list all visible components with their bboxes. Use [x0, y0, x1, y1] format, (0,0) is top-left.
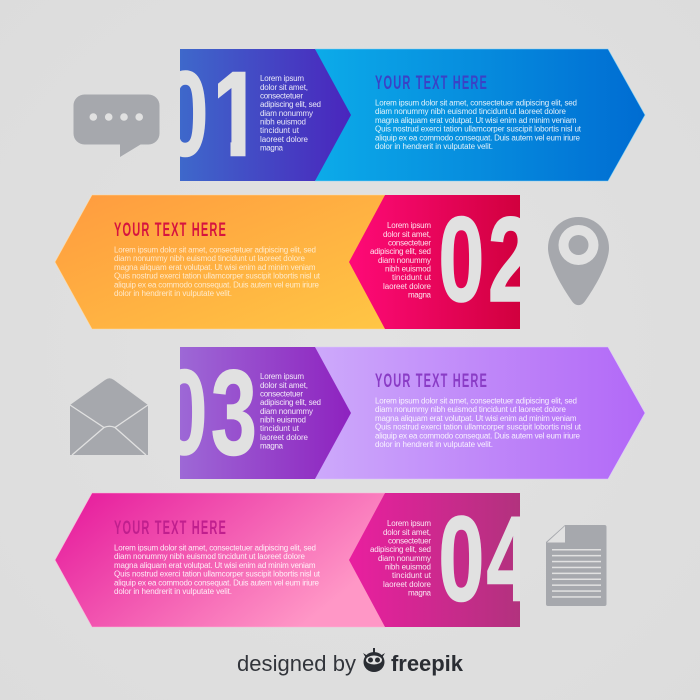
short text 01: adipiscing elit, sed: [260, 100, 321, 109]
short text 03: tincidunt ut: [260, 424, 300, 433]
short text 01: nibh euismod: [260, 118, 306, 126]
heading 01: YOUR TEXT HERE: [375, 73, 488, 94]
heading 02: YOUR TEXT HERE: [114, 220, 227, 241]
short text 01: [260, 74, 321, 152]
short text 03: laoreet dolore: [260, 433, 309, 442]
short text 02: consectetuer: [388, 238, 431, 248]
arrow: blue text band: [315, 49, 645, 181]
body text 01: aliquip ex ea commodo consequat. Duis autem vel eum iriure: [375, 133, 581, 142]
short text 04: nibh euismod: [385, 562, 431, 572]
body text 04: aliquip ex ea commodo consequat. Duis autem vel eum iriure: [114, 578, 320, 587]
short text 03: Lorem ipsum: [260, 372, 304, 381]
short text 01: consectetuer: [260, 92, 303, 100]
body text 01: Lorem ipsum dolor sit amet, consectetuer adipiscing elit, sed: [375, 98, 577, 108]
icon: map pin: [548, 217, 609, 305]
short text 01: magna: [260, 144, 284, 152]
short text 04: dolor sit amet,: [383, 528, 431, 537]
panel: step 03: [162, 344, 645, 480]
freepik wordmark: freepik: [391, 651, 464, 676]
short text 04: consectetuer: [388, 536, 431, 546]
body text 03: [375, 396, 582, 449]
footer credit text: designed by: [237, 651, 356, 676]
short text 04: tincidunt ut: [392, 571, 432, 580]
body text 03: dolor in hendrerit in vulputate velit.: [375, 440, 493, 449]
icon: document: [546, 525, 606, 606]
body text 01: Quis nostrud exerci tation ullamcorper suscipit lobortis nisl ut: [375, 125, 582, 134]
body text 02: magna aliquam erat volutpat. Ut wisi enim ad minim veniam: [114, 263, 316, 272]
number 02: 0: [438, 191, 484, 327]
body text 04: Quis nostrud exerci tation ullamcorper suscipit lobortis nisl ut: [114, 570, 321, 579]
body text 01: dolor in hendrerit in vulputate velit.: [375, 142, 493, 151]
short text 03: adipiscing elit, sed: [260, 398, 321, 407]
short text 02: adipiscing elit, sed: [370, 247, 431, 256]
short text 02: nibh euismod: [385, 264, 431, 274]
body text 04: dolor in hendrerit in vulputate velit.: [114, 587, 232, 596]
number 03: [180, 368, 254, 456]
short text 01: diam nonummy: [260, 109, 313, 118]
arrow: crimson number band: [349, 195, 520, 329]
number 03: 3: [211, 344, 257, 480]
number 01: 1: [210, 47, 263, 182]
number 03: 0: [162, 344, 207, 480]
body text 03: Quis nostrud exerci tation ullamcorper suscipit lobortis nisl ut: [375, 423, 582, 432]
short text 02: magna: [408, 290, 432, 300]
short text 02: diam nonummy: [378, 256, 431, 265]
short text 04: laoreet dolore: [383, 580, 432, 589]
short text 02: tincidunt ut: [392, 273, 432, 282]
short text 04: adipiscing elit, sed: [370, 545, 431, 554]
number 01: [180, 70, 246, 158]
short text 01: tincidunt ut: [260, 126, 300, 135]
body text 03: aliquip ex ea commodo consequat. Duis autem vel eum iriure: [375, 431, 581, 440]
arrow: indigo number band: [180, 49, 351, 181]
body text 01: [375, 98, 582, 151]
body text 03: diam nonummy nibh euismod tincidunt ut laoreet dolore: [375, 405, 567, 414]
arrow: magenta number band: [349, 493, 520, 627]
body text 02: dolor in hendrerit in vulputate velit.: [114, 289, 232, 298]
short text 03: consectetuer: [260, 390, 303, 398]
short text 03: [260, 372, 321, 450]
body text 04: magna aliquam erat volutpat. Ut wisi enim ad minim veniam: [114, 561, 316, 570]
panel: step 02: [55, 191, 534, 329]
short text 01: Lorem ipsum: [260, 74, 304, 83]
body text 01: diam nonummy nibh euismod tincidunt ut laoreet dolore: [375, 107, 567, 116]
number 02: 2: [488, 191, 534, 327]
short text 01: dolor sit amet,: [260, 83, 308, 92]
short text 02: Lorem ipsum: [387, 221, 431, 230]
arrow: lilac text band: [315, 347, 645, 479]
icon: freepik mascot: [363, 648, 385, 672]
body text 04: [114, 544, 321, 596]
short text 04: magna: [408, 588, 432, 598]
arrow: orange text band: [55, 195, 385, 329]
short text 04: Lorem ipsum: [387, 519, 431, 528]
body text 02: Quis nostrud exerci tation ullamcorper suscipit lobortis nisl ut: [114, 272, 321, 281]
footer: designed by freepik: [237, 648, 464, 676]
body text 02: Lorem ipsum dolor sit amet, consectetuer adipiscing elit, sed: [114, 246, 316, 254]
panel: step 01: [162, 46, 645, 182]
arrow: pink text band: [55, 493, 385, 627]
short text 03: diam nonummy: [260, 407, 313, 416]
icon: open envelope: [70, 378, 148, 455]
short text 03: magna: [260, 442, 284, 450]
short text 02: [370, 221, 432, 300]
number 02: [441, 216, 520, 303]
icon: speech bubble: [74, 94, 160, 157]
short text 03: nibh euismod: [260, 416, 306, 424]
short text 01: laoreet dolore: [260, 135, 309, 144]
short text 04: diam nonummy: [378, 554, 431, 563]
short text 02: dolor sit amet,: [383, 230, 431, 239]
heading 04: YOUR TEXT HERE: [114, 518, 227, 539]
number 01: 0: [162, 46, 208, 181]
body text 04: diam nonummy nibh euismod tincidunt ut laoreet dolore: [114, 552, 306, 561]
arrow: purple number band: [180, 347, 351, 479]
number 04: [441, 515, 520, 602]
body text 03: magna aliquam erat volutpat. Ut wisi enim ad minim veniam: [375, 414, 577, 423]
body text 04: Lorem ipsum dolor sit amet, consectetuer adipiscing elit, sed: [114, 544, 316, 552]
short text 04: [370, 519, 432, 598]
body text 01: magna aliquam erat volutpat. Ut wisi enim ad minim veniam: [375, 116, 577, 125]
body text 02: diam nonummy nibh euismod tincidunt ut laoreet dolore: [114, 254, 306, 263]
short text 03: dolor sit amet,: [260, 381, 308, 390]
body text 02: [114, 246, 321, 298]
body text 03: Lorem ipsum dolor sit amet, consectetuer adipiscing elit, sed: [375, 396, 577, 406]
short text 02: laoreet dolore: [383, 282, 432, 291]
panel: step 04: [55, 491, 532, 627]
number 04: 4: [486, 491, 532, 626]
body text 02: aliquip ex ea commodo consequat. Duis autem vel eum iriure: [114, 280, 320, 289]
heading 03: YOUR TEXT HERE: [375, 371, 488, 392]
number 04: 0: [438, 491, 484, 626]
